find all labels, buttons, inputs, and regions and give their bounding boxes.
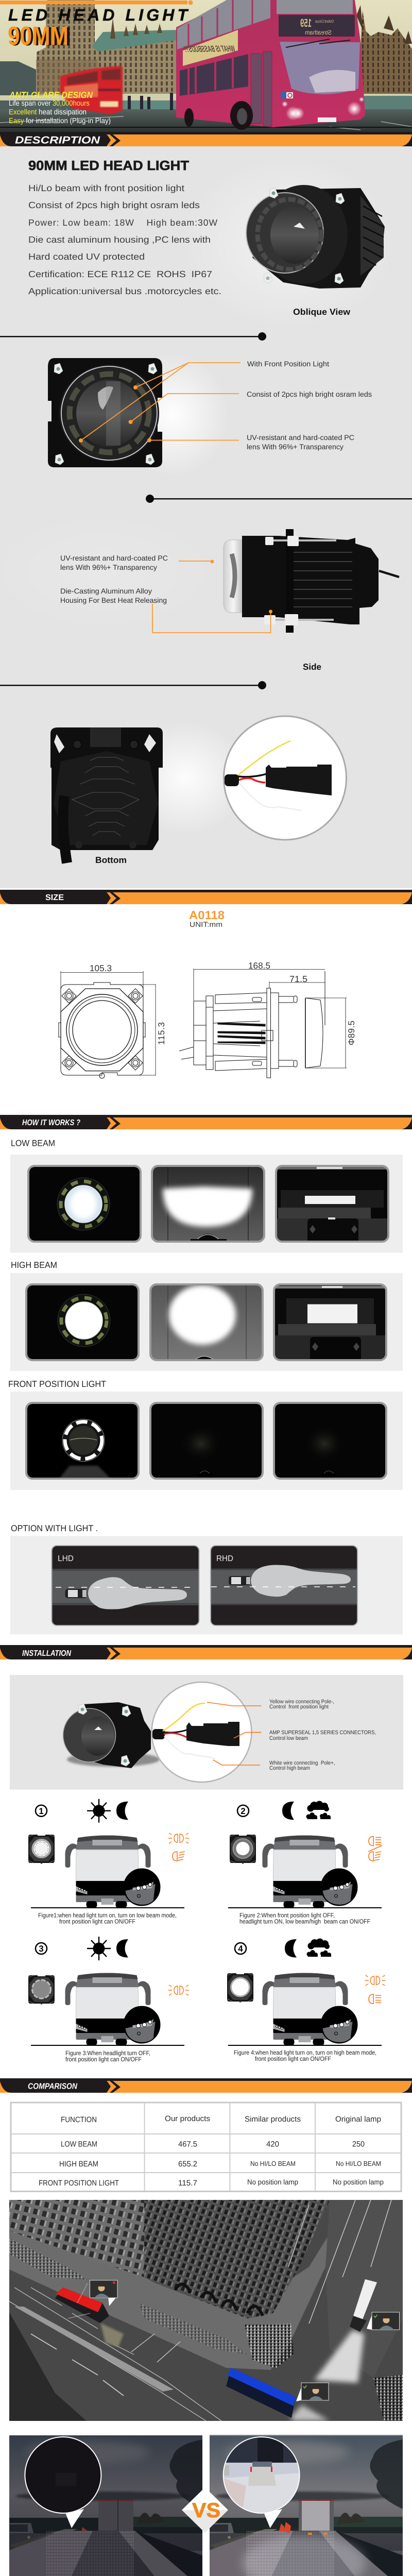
pavement (9, 2231, 328, 2370)
photo: position light tunnel (274, 1403, 386, 1479)
icon: clouds (307, 1938, 331, 1957)
wiring notes: AMP SUPERSEAL 1,5 SERIES CONNECTORS, (269, 1730, 376, 1736)
hero feature text: Excellent heat dissipation (9, 108, 87, 116)
panel: wiring (10, 1675, 403, 1790)
description list: Consist of 2pcs high bright osram leds (28, 200, 200, 210)
figure 4 (227, 1938, 385, 2062)
icon: position light (168, 1833, 189, 1843)
icon: clouds (306, 1801, 331, 1819)
caption (239, 1912, 370, 1925)
main double decker bus (176, 0, 365, 130)
description list: Certification: ECE R112 CE ROHS IP67 (28, 269, 212, 279)
description list: Die cast aluminum housing ,PC lens with (28, 234, 211, 245)
comparison table: Our products (165, 2114, 210, 2123)
product photo: front headlight (48, 358, 162, 467)
photo: high beam wall pattern (150, 1284, 263, 1360)
callout text: front view (247, 360, 372, 451)
section header: comparison (0, 2078, 412, 2093)
comparison table: Original lamp (335, 2115, 381, 2124)
icon: headlight state (230, 1835, 256, 1864)
description list (28, 183, 221, 296)
vs badge: VS (192, 2499, 220, 2522)
photo: headlight with shadow (63, 1702, 160, 1768)
inset: connector (151, 1682, 251, 1782)
bus destination display (279, 15, 355, 37)
description list: Hard coated UV protected (28, 251, 145, 262)
heading: 90mm led head light: 90MM LED HEAD LIGHT (28, 158, 189, 173)
icon: headlight state (227, 1973, 253, 2003)
panel: high beam (10, 1273, 403, 1371)
caption: Figure 3:When headlight turn OFF, (65, 2049, 150, 2057)
comparison table: HIGH BEAM (59, 2160, 98, 2168)
timeline marker 2 (146, 495, 412, 503)
icon: moon (116, 1939, 128, 1958)
icon: big ben tower (37, 0, 95, 94)
comparison table: 655.2 (178, 2160, 197, 2168)
beams (100, 2323, 364, 2421)
hero banner (0, 0, 412, 132)
comparison table: No HI/LO BEAM (336, 2160, 381, 2167)
photo: low beam tunnel (276, 1166, 388, 1242)
comparison table: Similar products (245, 2115, 301, 2124)
model number (189, 908, 225, 928)
wiring notes: Yellow wire connecting Pole-, (269, 1699, 334, 1705)
section header: size (0, 890, 412, 904)
comparison table: LOW BEAM (61, 2140, 97, 2148)
bus destination display: 159 (300, 16, 312, 29)
wiring notes: Control low beam (269, 1735, 308, 1741)
description list: Hi/Lo beam with front position light (28, 183, 184, 193)
section header: how it works (0, 1115, 412, 1129)
product photo: side headlight (224, 529, 399, 633)
parliament building left (36, 18, 178, 95)
icon: high beam (369, 1837, 381, 1846)
number 1: 1 (39, 1806, 44, 1816)
icon: sun (87, 1799, 111, 1823)
red bus (55, 2283, 109, 2323)
photo: high beam tunnel (274, 1284, 386, 1360)
diagram: rhd: RHD (216, 1554, 233, 1563)
callout text: side view: Housing For Best Heat Releasing (60, 596, 167, 604)
median (14, 2307, 174, 2392)
figure 2 (228, 1801, 382, 1925)
photo: aerial street scene (9, 2200, 403, 2421)
section header: description (0, 132, 412, 146)
bus headlights (281, 92, 364, 122)
number 3: 3 (39, 1944, 44, 1954)
caption: Figure 4:when head light turn on, turn on high beam mode, (234, 2049, 376, 2056)
driver card: happy bottom (296, 2383, 329, 2401)
photo: high beam lamp (26, 1284, 139, 1360)
icon: moon (285, 1939, 297, 1958)
dimension: width (61, 963, 143, 1005)
bus destination display: Oxford Circus (315, 19, 334, 24)
product photo: bottom headlight (50, 727, 163, 863)
hero feature text: ANTI-GLARE DESIGN (9, 90, 93, 100)
driver card: frowning (90, 2280, 117, 2306)
label: bottom: Bottom (95, 855, 127, 865)
callout text: front view: UV-resistant and hard-coated PC (247, 433, 354, 442)
railing and road (0, 96, 412, 132)
bus destination display: Streatham (305, 29, 332, 36)
icon: high beam (369, 1994, 381, 2004)
road right edge (325, 2200, 403, 2378)
number 2: 2 (241, 1806, 246, 1816)
ground line (228, 2045, 382, 2046)
wiring notes: Control front position light (269, 1704, 329, 1710)
heading: high beam: HIGH BEAM (11, 1260, 57, 1270)
icon: moon (116, 1802, 128, 1820)
comparison table: 250 (352, 2140, 365, 2148)
caption (38, 1912, 177, 1925)
section header: size: SIZE (45, 893, 64, 902)
bus side upper windows (177, 0, 270, 49)
title: led head light: LED HEAD LIGHT (8, 6, 188, 24)
dimension: width: 105.3 (90, 963, 112, 973)
dimension: length: 168.5 (248, 961, 270, 971)
comparison table: 420 (266, 2140, 279, 2148)
section header: comparison: COMPARISON (28, 2082, 77, 2091)
icon: sun (87, 1937, 111, 1960)
driver card: happy right (367, 2312, 400, 2330)
caption: Figure 2:When front position light OFF, (239, 1912, 335, 1919)
photo: low beam wall pattern (152, 1166, 264, 1242)
bus side advert (182, 30, 238, 66)
parliament building right (356, 5, 412, 94)
caption (65, 2049, 150, 2063)
clips (336, 193, 345, 204)
ground line (31, 2045, 184, 2046)
icon: headlight state (28, 1835, 55, 1864)
bus front upper window (277, 0, 353, 14)
photo: low beam lamp (28, 1166, 141, 1242)
illustration: bus (65, 1835, 160, 1908)
photo: position light lamp (26, 1403, 139, 1479)
speech bubble: bright view (223, 2437, 300, 2528)
dimension: length: 71.5 (289, 974, 307, 984)
caption: front position light can ON/OFF (65, 2056, 142, 2063)
caption: headlight turn ON, low beam/high beam can ON/OFF (239, 1918, 370, 1925)
comparison table: No HI/LO BEAM (250, 2160, 296, 2167)
callout text: front view: With Front Position Light (247, 360, 329, 368)
wiring notes (269, 1699, 376, 1771)
icon: headlight state (28, 1975, 55, 2005)
technical drawing: side (179, 961, 356, 1078)
section header: installation (0, 1645, 412, 1659)
dimension: diameter (305, 998, 356, 1068)
wiring notes: White wire connecting Pole+, (269, 1760, 335, 1766)
road markings (9, 2200, 391, 2421)
orange top rule (0, 0, 193, 5)
caption: front position light can ON/OFF (59, 1918, 135, 1925)
bus side lower windows (180, 54, 248, 96)
callout text: side view: lens With 96%+ Transparency (60, 563, 157, 571)
panel: low beam (10, 1155, 403, 1253)
callout text: side view (60, 554, 168, 604)
section header: description: DESCRIPTION (15, 135, 100, 146)
comparison table (11, 2103, 401, 2192)
technical drawing: front (59, 963, 166, 1078)
title: 90mm: 90MM (9, 22, 71, 51)
diagram: rhd (211, 1546, 357, 1625)
crowd (245, 2324, 294, 2368)
bus windshield (280, 42, 360, 94)
number 4 (235, 1943, 246, 1954)
trees (9, 2312, 87, 2421)
comparison table: No position lamp (247, 2178, 298, 2186)
model number: A0118 (189, 908, 225, 922)
icon: position light (168, 1985, 189, 1995)
dimension: length (194, 961, 325, 1001)
title: 90mm: 90MM (8, 21, 68, 50)
background trees left (0, 61, 36, 95)
section header: installation: INSTALLATION (22, 1649, 71, 1658)
ground line (228, 1907, 382, 1908)
icon: low beam (173, 1852, 185, 1861)
blue bus (226, 2368, 296, 2418)
number 1 (36, 1805, 47, 1817)
comparison table: No position lamp (333, 2178, 384, 2186)
buildings (9, 2200, 330, 2318)
timeline marker 3 (0, 681, 266, 689)
icon: position light (365, 1975, 385, 1986)
hero feature text: Life span over 30,000hours (9, 99, 90, 108)
icon: moon (282, 1802, 294, 1820)
illustration: bus (65, 1973, 160, 2045)
heading: front position light: FRONT POSITION LIGHT (8, 1379, 106, 1389)
photo: position light wall (150, 1403, 263, 1479)
pedestrians (128, 93, 173, 110)
panel: option with light (10, 1536, 403, 1634)
bus side advert: WHAT IS BASSBUDS?! (182, 44, 236, 54)
callouts: side view (152, 560, 272, 633)
speech bubble: dark view (25, 2437, 101, 2528)
callouts: front view (79, 363, 241, 443)
callout text: front view: Consist of 2pcs high bright osram leds (247, 390, 372, 398)
inset: connector close-up (224, 716, 346, 840)
dimension: height (138, 985, 166, 1075)
illustration: bus (262, 1835, 357, 1908)
vs badge (182, 2487, 228, 2533)
timeline marker 1 (0, 332, 266, 341)
comparison table: FUNCTION (61, 2115, 97, 2124)
lens (246, 193, 323, 273)
diagram: lhd: LHD (58, 1554, 74, 1563)
number 2 (237, 1805, 249, 1817)
diagram: lhd (52, 1546, 199, 1625)
comparison table: 467.5 (178, 2140, 197, 2148)
comparison table: 115.7 (178, 2179, 197, 2188)
description list: Application:universal bus .motorcycles etc. (28, 286, 221, 296)
callout text: front view: lens With 96%+ Transparency (247, 443, 344, 451)
icon: low beam with slash (368, 1845, 382, 1861)
white bus (350, 2279, 377, 2332)
caption (234, 2049, 376, 2062)
caption: front position light can ON/OFF (255, 2055, 331, 2062)
model number: UNIT:mm (190, 920, 222, 928)
leader lines (207, 1702, 262, 1765)
caption: Figure1:when head light turn on, turn on low beam mode, (38, 1912, 177, 1919)
panel: front position light (10, 1392, 403, 1490)
ground line (31, 1907, 184, 1908)
illustration: bus (262, 1973, 357, 2045)
description list: Power: Low beam: 18W High beam:30W (28, 217, 217, 228)
hero feature text: Easy for installation (Plug-in Play) (9, 117, 111, 125)
dimension: diameter: Φ89.5 (347, 1021, 356, 1045)
number 4: 4 (238, 1944, 243, 1954)
dimension: height: 115.3 (157, 1022, 166, 1045)
label: oblique view: Oblique View (293, 307, 351, 317)
number 3 (36, 1943, 47, 1954)
red bus (60, 66, 123, 114)
product photo: oblique headlight (246, 185, 385, 289)
wiring notes: Control high beam (269, 1765, 310, 1771)
hero feature text (9, 90, 111, 125)
heading: low beam: LOW BEAM (11, 1139, 55, 1148)
figure 1 (28, 1799, 189, 1925)
icon: car (229, 1576, 251, 1585)
comparison table: FRONT POSITION LIGHT (39, 2179, 119, 2188)
label: side: Side (303, 662, 321, 672)
heading: option with light: OPTION WITH LIGHT . (11, 1523, 98, 1533)
callout text: side view: UV-resistant and hard-coated PC (60, 554, 168, 562)
callout text: side view: Die-Casting Aluminum Alloy (60, 587, 152, 595)
section header: how it works: HOW IT WORKS ? (22, 1118, 80, 1127)
photo: similar products night road (9, 2435, 202, 2576)
photo: our products night road (210, 2435, 403, 2576)
panel: description background (0, 146, 412, 888)
icon: car (65, 1589, 87, 1598)
figure 3 (28, 1937, 189, 2063)
